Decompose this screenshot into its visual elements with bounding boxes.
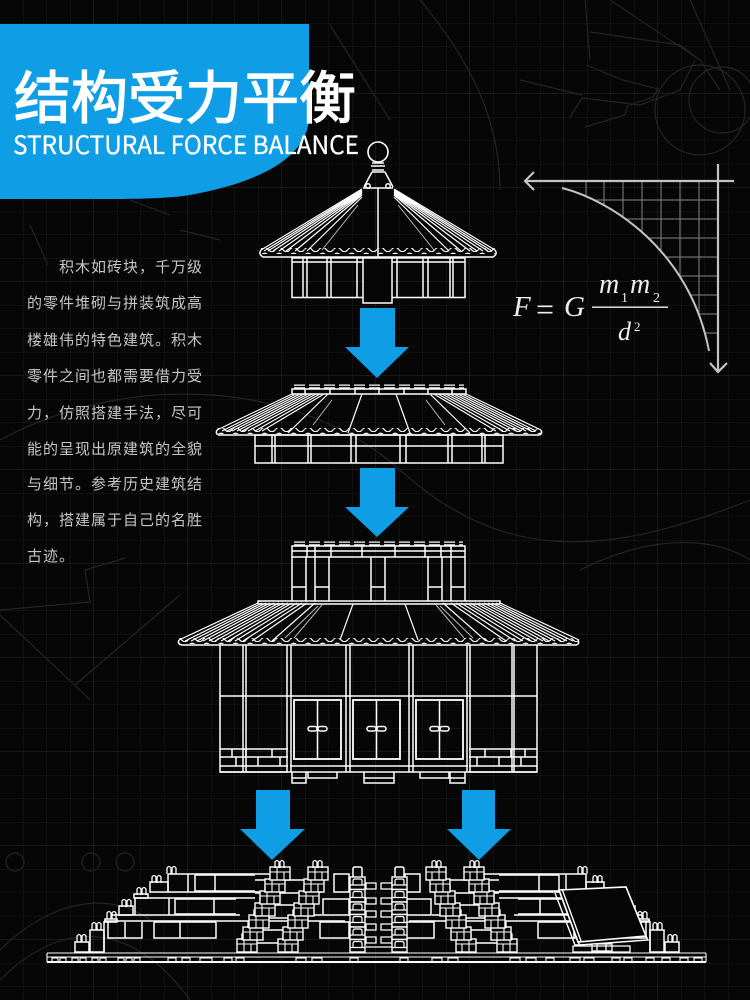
main hall <box>178 544 579 783</box>
formula <box>512 269 668 346</box>
arrow 3 <box>240 790 305 860</box>
body text: 积木如砖块，千万级 <box>59 259 203 276</box>
arrow 1 <box>345 308 409 378</box>
pavilion wall <box>292 258 465 303</box>
body text: 的零件堆砌与拼装筑成高 <box>27 295 203 312</box>
stele <box>555 887 648 952</box>
formula: m <box>630 269 650 300</box>
central stair <box>350 867 407 952</box>
formula: 2 <box>634 319 640 334</box>
blue title panel <box>0 24 309 199</box>
wall <box>255 435 503 463</box>
doors <box>294 700 463 759</box>
axis arrows <box>525 164 734 372</box>
body text: 零件之间也都需要借力受 <box>27 368 203 385</box>
upper drum <box>292 544 465 601</box>
finial ball <box>363 142 393 188</box>
formula: F <box>512 291 531 323</box>
body text: 构，搭建属于自己的名胜 <box>27 512 203 529</box>
conical roof <box>260 188 496 258</box>
foot blocks <box>292 772 465 783</box>
main roof <box>179 603 353 641</box>
brick plinths <box>220 749 537 772</box>
formula: d <box>618 317 632 346</box>
subtitle: STRUCTURAL FORCE BALANCE <box>13 126 359 162</box>
formula: = <box>536 291 554 327</box>
title: 结构受力平衡 <box>14 67 356 131</box>
force diagram <box>525 164 734 372</box>
body text: 与细节。参考历史建筑结 <box>27 476 203 493</box>
body text: 古迹。 <box>27 548 75 565</box>
arrow 2 <box>345 468 409 537</box>
top pavilion <box>260 142 496 303</box>
middle roof tier <box>216 386 542 463</box>
body text: 力，仿照搭建手法，尽可 <box>27 405 203 422</box>
arrow 4 <box>447 790 511 860</box>
hall walls <box>220 645 537 772</box>
formula: 2 <box>653 291 660 306</box>
base strip <box>47 953 706 962</box>
formula: 1 <box>621 291 628 306</box>
formula: m <box>599 269 619 300</box>
body text: 能的呈现出原建筑的全貌 <box>27 440 203 458</box>
terraced base <box>47 860 706 962</box>
formula: G <box>564 291 585 323</box>
curve grid <box>586 182 717 334</box>
studs <box>292 386 466 394</box>
body text <box>27 259 203 565</box>
roof <box>217 394 362 433</box>
body text: 楼雄伟的特色建筑。积木 <box>27 332 203 349</box>
